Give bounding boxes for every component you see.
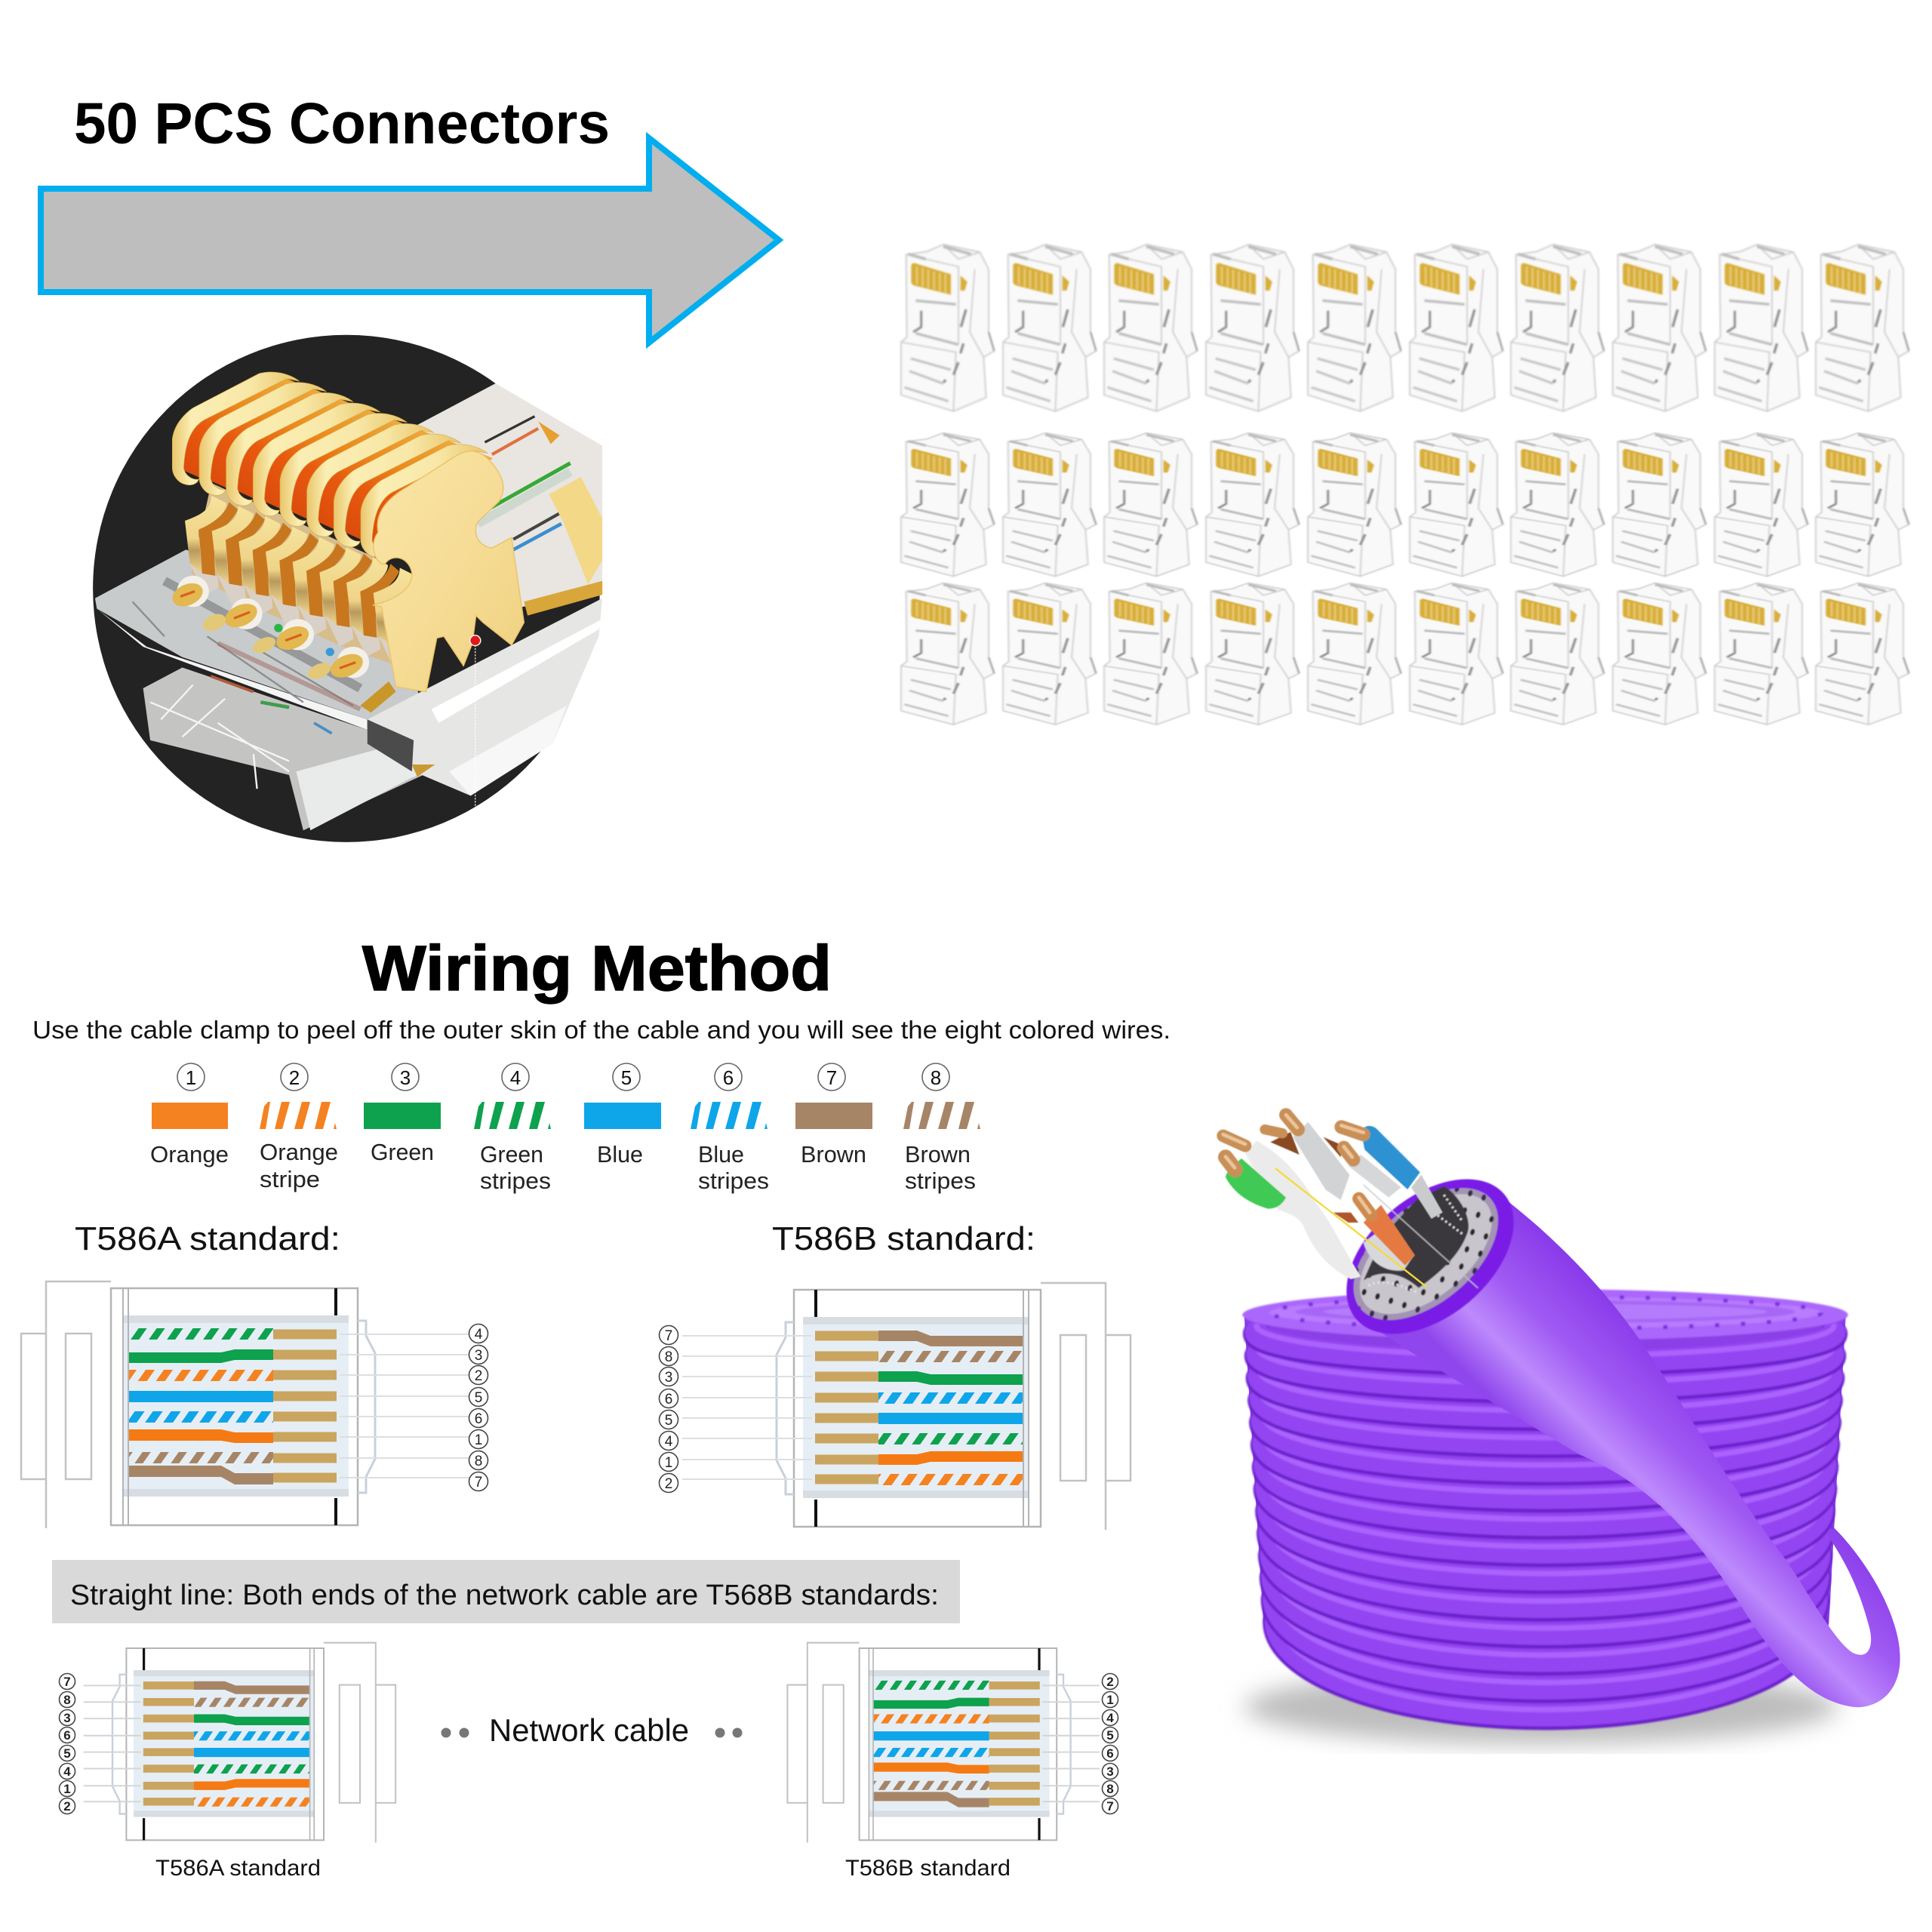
coil rings [1257,1326,1834,1717]
pin numbers: 2 [475,1368,482,1384]
pin numbers: 5 [475,1390,482,1406]
heading: T586B standard: T586B standard: [772,1220,1035,1257]
pin numbers: 5 [1106,1728,1114,1743]
transparent plastic top plate [95,549,432,740]
legend item 7 brown: Brown [801,1141,866,1168]
cable tube with loop [1381,1191,1900,1707]
pin numbers: 3 [665,1370,672,1386]
pin numbers: 6 [1106,1746,1114,1761]
heading: wiring method: Wiring Method [362,933,832,1004]
banner: straight line: Straight line: Both ends of the network cable are T568B standards: [70,1580,939,1611]
pin numbers [59,1674,75,1814]
panel: cable end with exposed wires [1223,1115,1543,1364]
arrow [41,138,779,343]
legend item 8 brown stripes: stripes [905,1168,976,1194]
legend item 3 green: 3 [400,1066,411,1089]
pin numbers [660,1325,678,1493]
legend item 4 green stripes: Green [480,1141,543,1168]
pin numbers: 1 [1106,1693,1114,1707]
red marker dot [470,635,481,808]
transparent plastic right block [368,595,620,795]
pin numbers [469,1324,488,1491]
legend item 4 green stripes: stripes [480,1168,551,1194]
cable mouth [1318,1149,1543,1364]
legend: wire colours [150,1063,980,1194]
label: bottom T586B standard: T586B standard [845,1856,1011,1881]
diagram: bottom T586B connector [787,1643,1118,1843]
title: 50 PCS Connectors [74,91,610,156]
legend item 7 brown: 7 [826,1066,837,1089]
pin numbers: 6 [63,1728,71,1743]
banner: straight line [52,1560,960,1623]
legend item 3 green: Green [371,1139,434,1165]
legend item 1 orange: Orange [150,1141,229,1168]
pin numbers: 8 [665,1349,672,1365]
legend item 8 brown stripes: 8 [931,1066,941,1089]
heading: T586A standard: T586A standard: [75,1220,340,1257]
legend item 6 blue stripes: stripes [698,1168,769,1194]
ground shadow [1244,1669,1838,1745]
diagram: bottom T586A connector [59,1643,395,1843]
legend item 2 orange stripe: Orange [260,1139,338,1165]
pin numbers: 1 [475,1432,482,1448]
panel: 50 connectors grid [901,245,1909,724]
shadow crop edge [1192,1754,1932,1807]
connector row 2 [901,433,1909,577]
pin numbers: 7 [63,1675,71,1689]
legend item 5 blue [584,1063,661,1168]
legend item 3 green [364,1063,441,1165]
legend item 2 orange stripe: 2 [289,1066,300,1089]
legend item 7 brown [795,1063,872,1168]
legend item 4 green stripes: 4 [510,1066,521,1089]
pin numbers: 8 [475,1454,482,1469]
legend item 1 orange: 1 [186,1066,196,1089]
wire contact pins [168,576,396,712]
diagram: T586A connector [21,1281,488,1528]
diagram: T586B connector [660,1283,1131,1530]
legend item 6 blue stripes: Blue [698,1141,744,1168]
panel: purple cable coil [1192,1191,1932,1807]
pin numbers: 8 [63,1693,71,1707]
legend item 2 orange stripe: stripe [260,1166,320,1192]
pin numbers: 6 [475,1411,482,1427]
pin numbers: 7 [475,1475,482,1491]
legend item 1 orange [150,1063,229,1168]
pin numbers: 7 [665,1328,672,1344]
label: network cable: Network cable [489,1712,689,1748]
connector row 3 [901,583,1909,724]
legend item 4 green stripes [474,1063,551,1194]
legend item 8 brown stripes: Brown [905,1141,971,1168]
yellow drain wire [1275,1168,1426,1287]
pin numbers: 7 [1106,1799,1114,1814]
text: instruction: Use the cable clamp to peel off the outer skin of the cable and you will see the eight colored wires. [32,1016,1171,1044]
gold blades [172,372,493,667]
pin numbers: 5 [63,1746,71,1761]
pin numbers: 4 [1106,1711,1114,1725]
pin numbers: 5 [665,1413,672,1429]
exposed twisted wires [1223,1115,1443,1279]
pin numbers: 4 [665,1434,673,1450]
pin numbers: 8 [1106,1782,1114,1796]
label: network cable [441,1712,743,1748]
pin numbers: 4 [475,1327,483,1343]
pin numbers: 3 [1106,1764,1114,1779]
pin numbers: 2 [1106,1675,1114,1689]
label: bottom T586A standard: T586A standard [155,1856,321,1881]
pin numbers: 1 [665,1455,672,1471]
transparent plastic lower block [143,668,446,830]
legend item 5 blue: 5 [621,1066,632,1089]
pin numbers: 2 [63,1799,71,1814]
pin numbers: 3 [63,1711,71,1725]
panel: gold contact close-up [93,335,620,842]
connector row 1 [901,245,1909,411]
pin numbers: 3 [475,1348,482,1364]
legend item 2 orange stripe [260,1063,338,1192]
pin numbers [1102,1674,1118,1814]
pin numbers: 1 [63,1782,71,1796]
legend item 5 blue: Blue [597,1141,643,1168]
front gold blade [373,451,524,692]
pin numbers: 4 [63,1764,71,1779]
black circle background [93,335,600,842]
coil top surface [1242,1289,1848,1340]
pin numbers: 2 [665,1476,672,1492]
legend item 6 blue stripes [691,1063,769,1194]
legend item 6 blue stripes: 6 [723,1066,734,1089]
pin numbers: 6 [665,1392,672,1407]
legend item 8 brown stripes [903,1063,980,1194]
upper right cable interior [417,383,602,616]
coil body [1244,1317,1846,1722]
